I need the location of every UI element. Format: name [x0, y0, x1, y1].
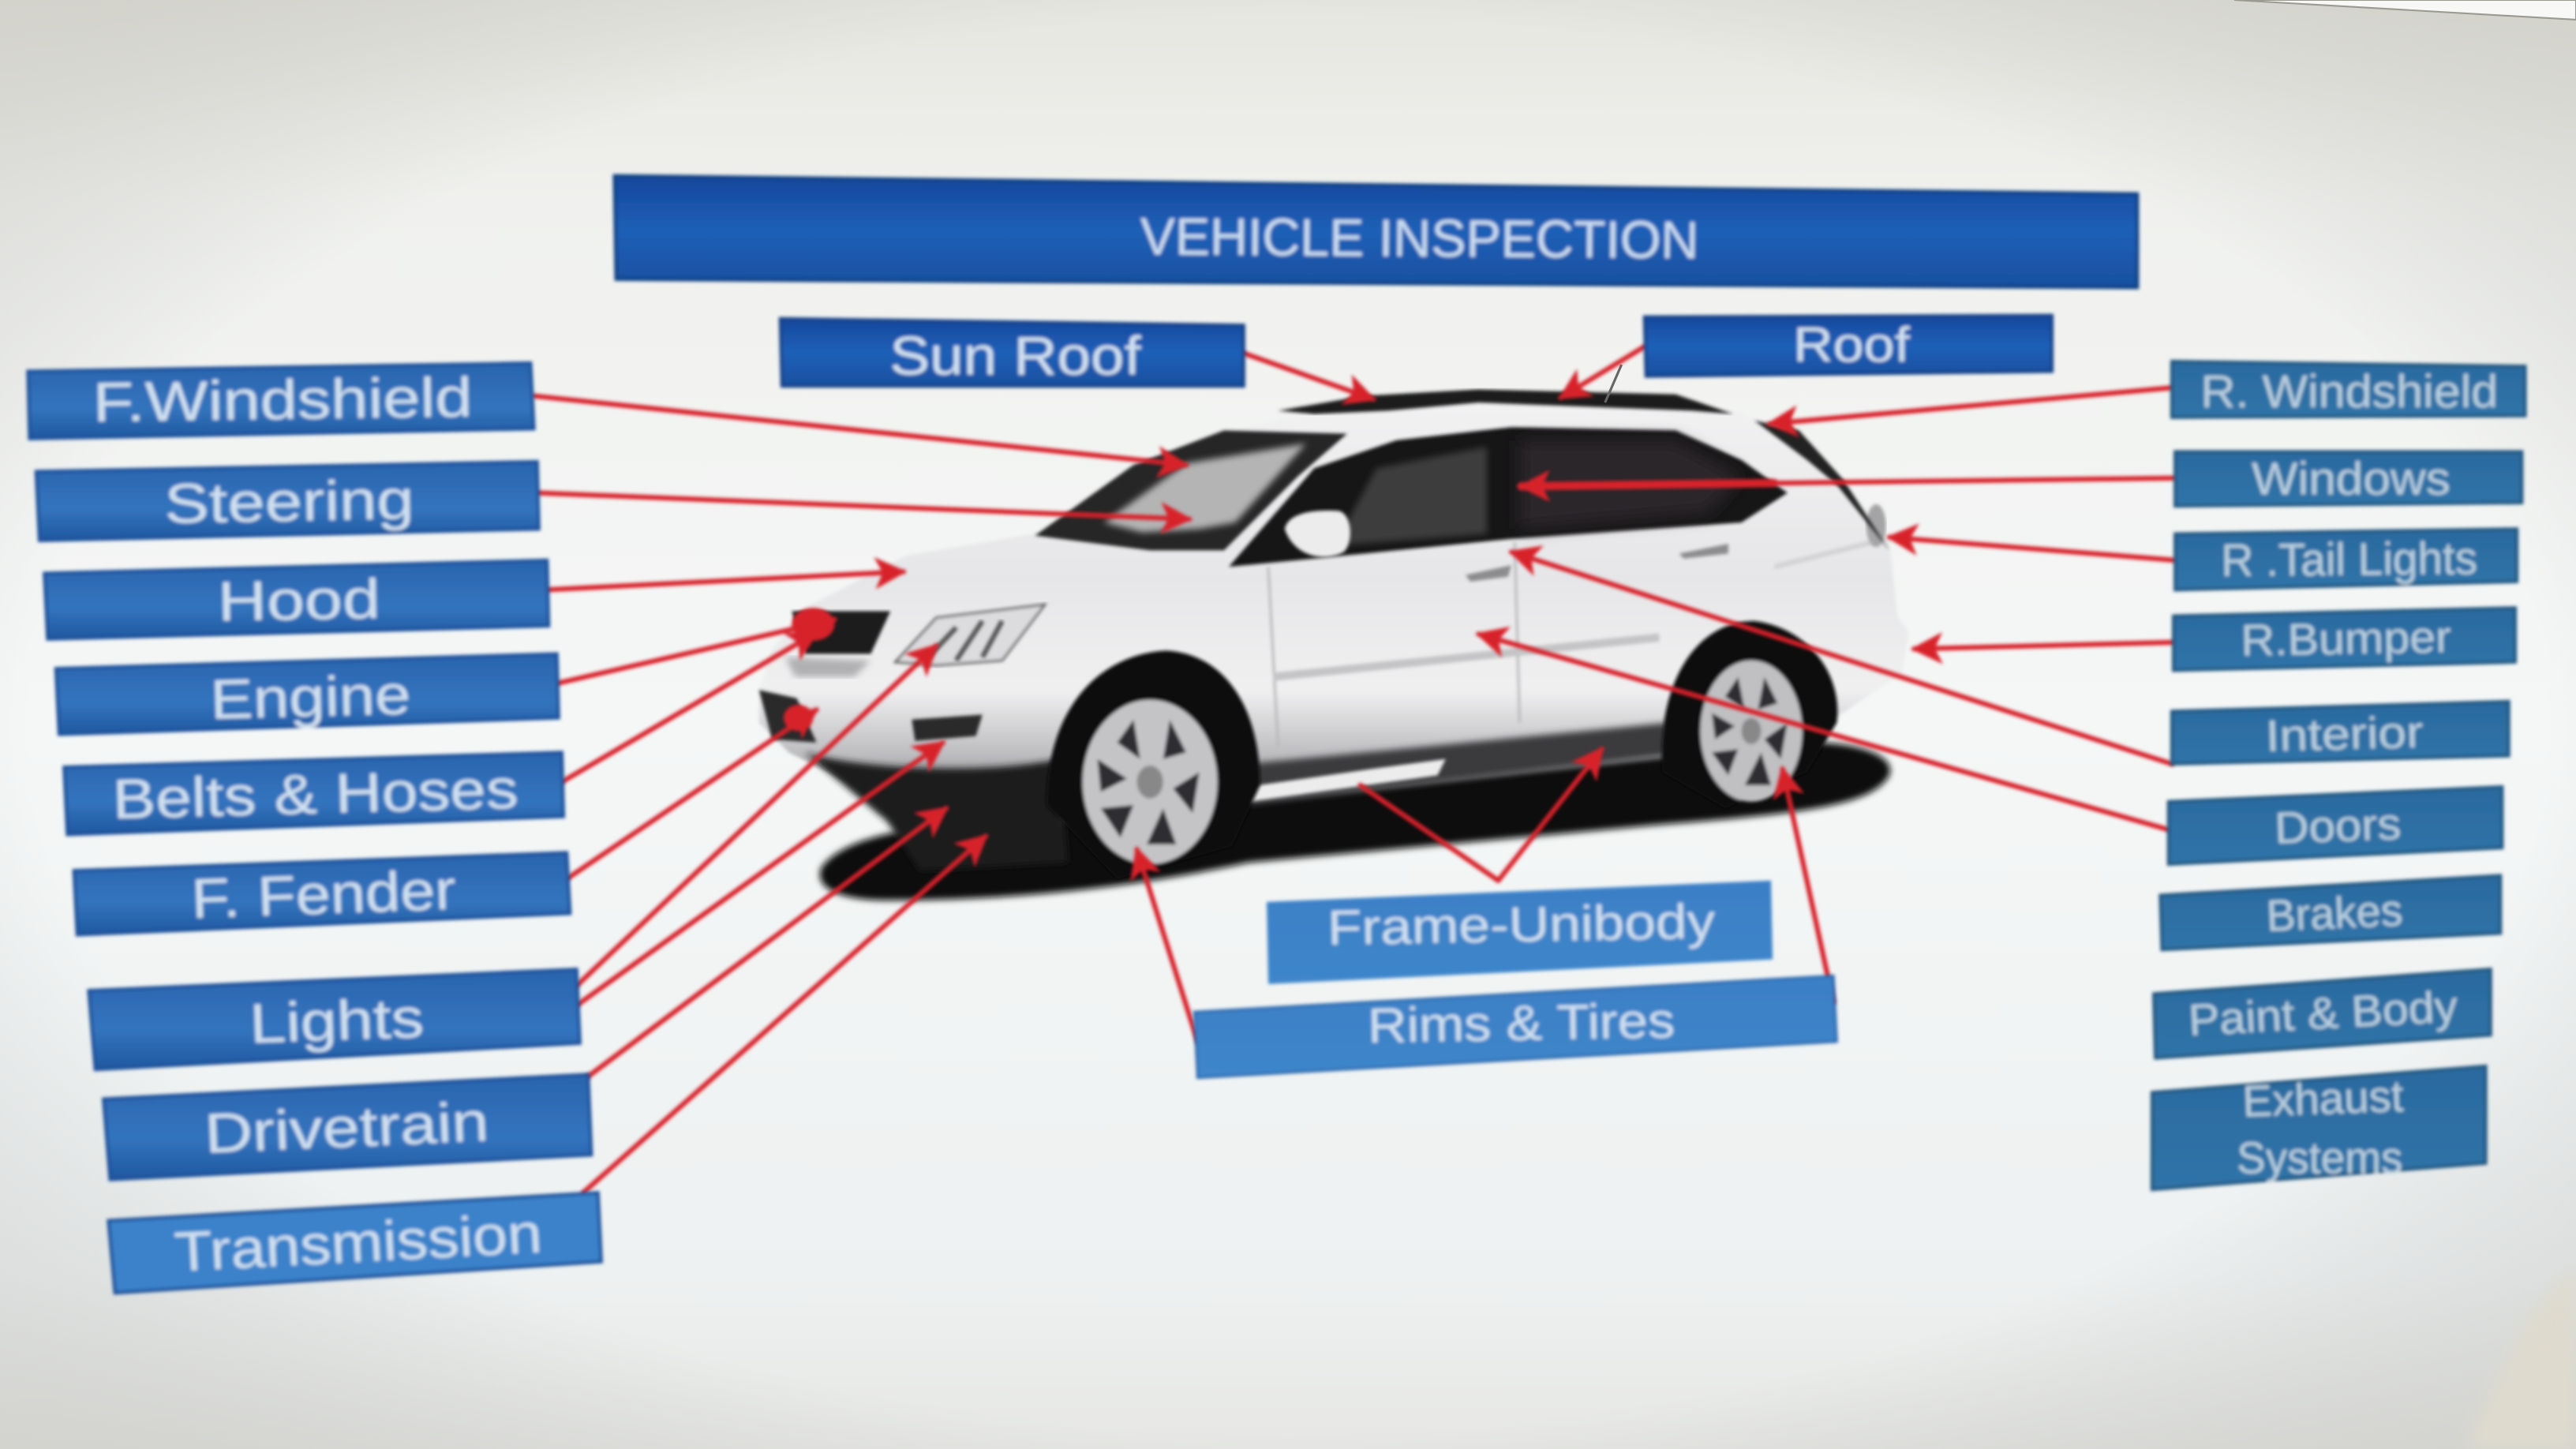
tail lamp	[1866, 504, 1886, 547]
arrow: frame to underbody	[1498, 749, 1602, 881]
antenna	[1605, 365, 1622, 402]
label: R .Tail Lights: R .Tail Lights	[2221, 533, 2477, 586]
label: Engine: Engine	[209, 663, 411, 731]
arrow: rear windshield	[1769, 388, 2172, 424]
label: Exhaust Systems: Exhaust	[2241, 1071, 2405, 1126]
front wheel	[1046, 650, 1260, 879]
label: Sun Roof	[781, 319, 1244, 387]
label: Steering: Steering	[164, 468, 414, 535]
arrow: steering	[537, 492, 1189, 519]
arrow: engine	[557, 620, 834, 683]
arrow: lights to fog lamp	[577, 743, 943, 1005]
title banner	[615, 176, 2137, 287]
label: Interior	[2172, 702, 2509, 764]
label: R.Bumper	[2174, 608, 2515, 670]
label: Steering	[36, 462, 539, 541]
red arrows	[534, 346, 2175, 1193]
label: Windows	[2175, 451, 2522, 506]
label: Exhaust Systems	[2152, 1066, 2486, 1189]
label: Roof	[1645, 316, 2052, 376]
arrow: rear bumper	[1914, 642, 2174, 649]
roof rails	[1279, 389, 1733, 414]
side windows	[1229, 427, 1788, 567]
arrow: front fender	[567, 710, 817, 879]
arrow: lights to headlight	[577, 646, 937, 986]
front grille	[792, 611, 890, 653]
front lower valance	[805, 752, 1068, 871]
label: Frame-Unibody	[1267, 881, 1773, 984]
label: Exhaust Systems: Systems	[2237, 1133, 2402, 1182]
right label column	[2152, 361, 2525, 1189]
label: R .Tail Lights	[2175, 529, 2517, 590]
arrow: transmission	[583, 837, 986, 1193]
label: Brakes: Brakes	[2265, 885, 2404, 941]
label: Transmission	[108, 1193, 601, 1293]
rear glass edge	[1754, 421, 1889, 550]
label: F.Windshield	[28, 363, 534, 439]
label: Rims and Tires	[1194, 975, 1837, 1078]
car body	[759, 395, 1909, 805]
title banner: VEHICLE INSPECTION	[1140, 208, 1699, 270]
label: Roof: Roof	[1793, 317, 1911, 373]
arrow: tail lights	[1889, 537, 2175, 560]
label: Belts and Hoses	[64, 752, 564, 834]
arrow: sun roof	[1244, 354, 1373, 399]
label: Interior: Interior	[2265, 707, 2424, 761]
label: F.Windshield: F.Windshield	[92, 365, 473, 433]
label: Transmission: Transmission	[173, 1202, 544, 1283]
label: Doors	[2169, 787, 2502, 864]
arrow: doors	[1478, 635, 2169, 829]
top and centre labels	[781, 316, 2052, 1078]
arrow blobs at engine and fender	[784, 483, 1774, 731]
label: Hood	[44, 560, 549, 639]
label: F. Fender: F. Fender	[190, 859, 457, 930]
arrow: rims front	[1136, 849, 1198, 1042]
label: Drivetrain: Drivetrain	[204, 1090, 490, 1165]
label: Drivetrain	[103, 1074, 591, 1180]
arrow: frame to sill	[1361, 785, 1498, 881]
label: Sun Roof: Sun Roof	[889, 326, 1142, 387]
arrow: windows	[1522, 478, 2175, 486]
label: Lights	[88, 969, 580, 1069]
label: R. Windshield: R. Windshield	[2200, 366, 2498, 417]
label: Rims and Tires: Rims & Tires	[1367, 993, 1676, 1054]
label: Engine	[56, 653, 559, 734]
under-door dark band	[1249, 723, 1668, 805]
label: R.Bumper: R.Bumper	[2241, 612, 2451, 665]
headlight detail	[928, 621, 1002, 661]
door handles	[1466, 544, 1728, 582]
label: Belts and Hoses: Belts & Hoses	[112, 758, 519, 830]
label: Frame-Unibody: Frame-Unibody	[1327, 893, 1717, 956]
windshield	[1035, 430, 1347, 550]
label: Doors: Doors	[2274, 799, 2402, 853]
arrow: drivetrain	[586, 808, 946, 1078]
illustration: white SUV	[759, 365, 1909, 900]
arrow: rims rear	[1783, 769, 1833, 1002]
label: Lights: Lights	[249, 987, 425, 1055]
side step highlight	[1235, 759, 1446, 802]
label: Windows: Windows	[2252, 454, 2451, 505]
arrow: front windshield	[534, 396, 1186, 465]
ground shadow	[820, 742, 1890, 900]
label: F. Fender	[74, 852, 570, 934]
lower bumper intake	[759, 690, 983, 743]
arrow: hood	[547, 571, 904, 590]
label: Brakes	[2160, 876, 2500, 949]
arrow: belts and hoses	[562, 632, 817, 782]
label: Hood: Hood	[217, 567, 381, 633]
headlight	[895, 605, 1045, 665]
arrow: interior	[1511, 552, 2172, 764]
label: Paint and Body	[2154, 969, 2491, 1058]
left label column	[28, 363, 601, 1293]
grille lower lip	[785, 657, 871, 677]
door seams and side crease	[1268, 542, 1873, 747]
arrow: roof	[1561, 346, 1645, 398]
label: Paint and Body: Paint & Body	[2187, 981, 2458, 1045]
rear wheel	[1662, 621, 1837, 808]
side mirror	[1285, 511, 1350, 557]
